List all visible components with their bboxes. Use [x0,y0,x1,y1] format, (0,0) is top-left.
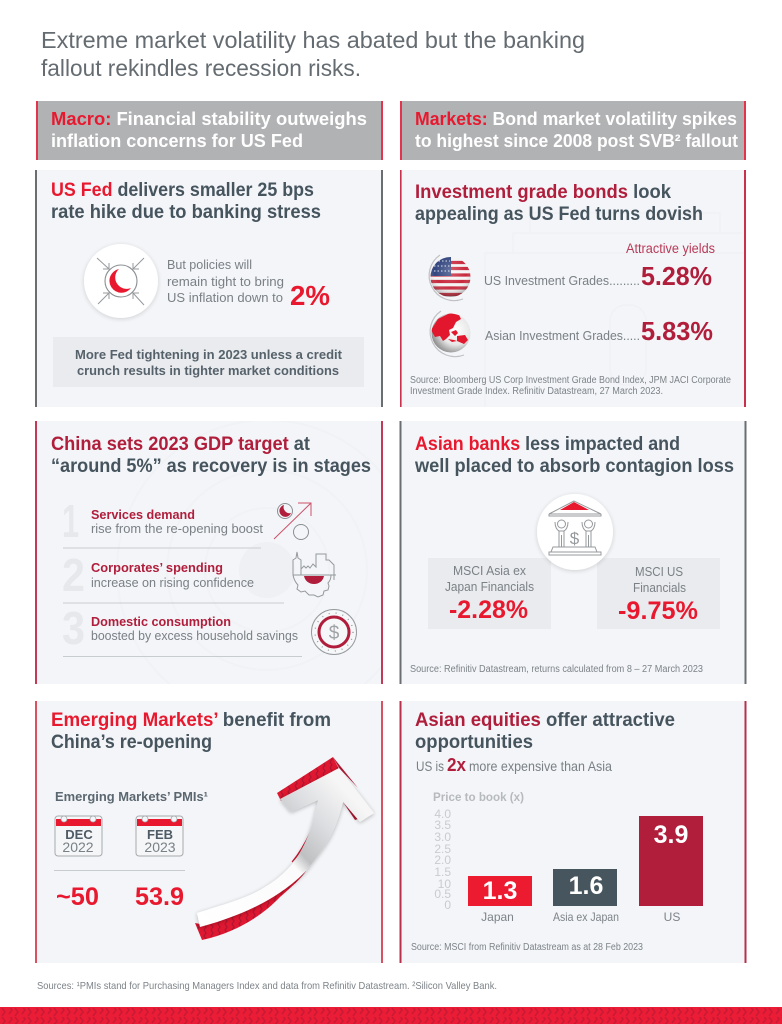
stat box: MSCI US: MSCI US [635,564,683,579]
panel: macro header: Macro: Financial stability outweighs [51,109,367,129]
bar chart: price to book: 4.0 [434,807,451,821]
label: attractive yields: Attractive yields [626,241,715,256]
item 2: corporates' spending: increase on rising confidence [91,575,254,590]
bar chart: price to book: 0.5 [434,887,451,901]
panel: investment grade bonds [400,170,746,407]
title: Extreme market volatility has abated but the banking [41,27,585,53]
item 1: services demand: rise from the re-opening boost [91,521,263,536]
title: fallout rekindles recession risks. [41,55,361,81]
bar: US [639,816,703,924]
icon: tightening circle [84,244,158,318]
panel: markets header: to highest since 2008 post SVB² fallout [415,131,738,151]
icon: US flag globe [429,255,471,301]
bar: Asia ex Japan: Asia ex Japan [553,910,619,924]
item 1: services demand [62,495,263,548]
footnote: sources: Sources: ¹PMIs stand for Purchasing Managers Index and data from Refinitiv Datastream. ²Silicon Valley Bank. [37,980,497,992]
bar: Asia ex Japan: 1.6 [569,872,603,900]
panel: Asian banks [400,421,746,684]
callout: more fed tightening [53,337,364,387]
source: equities: Source: MSCI from Refinitiv Datastream as at 28 Feb 2023 [411,942,643,953]
heading: Asian equities [415,710,675,753]
icon: calendar Dec 2022: 2022 [62,839,94,855]
bar chart: price to book: 3.5 [434,818,451,832]
stat box: MSCI US: -9.75% [618,597,698,625]
text: policies: remain tight to bring [167,274,284,289]
source: bonds: Source: Bloomberg US Corp Investment Grade Bond Index, JPM JACI Corporate [410,375,731,386]
bar chart: price to book: 10 [438,877,451,891]
subheading: 2x: US is [416,758,444,774]
arrow: rising [195,757,374,940]
bar chart: price to book: 1.5 [434,865,451,879]
panel: macro header: inflation concerns for US Fed [51,131,303,151]
stat box: MSCI Asia ex Japan: MSCI Asia ex [453,563,526,578]
stat box: MSCI Asia ex Japan: -2.28% [449,596,528,624]
callout: more fed tightening: crunch results in tighter market conditions [77,363,339,378]
icon: bank [537,494,613,570]
heading: investment grade [415,182,703,225]
icon: bank: $ [570,529,580,548]
bar: US: 3.9 [654,821,688,849]
stat: 2%: 2% [290,280,330,311]
icon: Asia globe [430,311,471,357]
heading: Emerging Markets: China’s re-opening [51,732,212,753]
subheading: 2x: 2x [447,755,466,775]
panel: Emerging Markets [35,701,383,963]
source: bonds: Investment Grade Index. Refinitiv Datastream, 27 March 2023. [410,386,663,397]
item 1: services demand: 1 [62,495,79,547]
row: Asian investment grades: 5.83% [641,316,713,346]
bar chart: price to book: Price to book (x) [433,790,524,804]
row: US investment grades [484,261,712,291]
bar: US: US [664,910,680,924]
item 3: domestic consumption [62,602,302,657]
icon: calendar Feb 2023: 2023 [144,839,176,855]
bar chart: price to book: 0 [444,898,451,912]
icon: calendar Feb 2023: FEB [147,827,173,842]
title [41,27,585,81]
stat box: MSCI Asia ex Japan [428,558,551,629]
heading: investment grade: appealing as US Fed turns dovish [415,204,703,225]
row: Asian investment grades: Asian Investment Grades..... [485,328,640,343]
stat: 53.9: 53.9 [135,883,184,911]
text: policies [167,257,284,305]
icon: dollar coin [312,610,356,654]
panel: markets header [400,101,746,160]
row: Asian investment grades [485,316,713,346]
icon: city gear [293,552,336,597]
subheading: 2x [416,755,612,775]
item 3: domestic consumption: boosted by excess household savings [91,628,298,643]
stat box: MSCI Asia ex Japan: Japan Financials [445,579,534,594]
bar: Japan [468,876,532,924]
subheading: 2x: more expensive than Asia [469,758,612,774]
row: US investment grades: US Investment Grades......... [484,273,640,288]
item 2: corporates' spending: Corporates’ spending [91,560,223,575]
icon: calendar Feb 2023 [136,816,183,856]
heading: US Fed: US Fed delivers smaller 25 bps [51,180,314,201]
bar chart: price to book: 3.0 [434,830,451,844]
stat box: MSCI US: Financials [633,580,686,595]
panel: markets header: Markets: Bond market volatility spikes [415,109,737,129]
text: policies: US inflation down to [167,290,283,305]
panel: US Fed [35,170,383,407]
heading: US Fed [51,180,321,223]
text: policies: But policies will [167,257,252,272]
bar: Japan: 1.3 [483,877,517,905]
callout: more fed tightening: More Fed tightening in 2023 unless a credit [75,347,343,362]
heading: investment grade: Investment grade bonds look [415,182,671,203]
item 2: corporates' spending: 2 [62,549,85,601]
icon: percent arrow [274,503,311,540]
row: US investment grades: 5.28% [641,261,712,291]
heading: Emerging Markets [51,710,331,753]
icon: dollar coin: $ [329,623,340,644]
bar chart: price to book: 2.0 [434,853,451,867]
bar chart: price to book [433,790,703,924]
panel: China GDP [35,421,383,684]
bar: Asia ex Japan [553,869,619,924]
item 2: corporates' spending [62,549,284,604]
source: banks: Source: Refinitiv Datastream, returns calculated from 8 – 27 March 2023 [410,664,703,675]
heading: China: “around 5%” as recovery is in stages [51,456,371,477]
icon: calendar Dec 2022: DEC [65,827,93,842]
stat box: MSCI US [597,558,720,629]
stat: ~50: ~50 [56,883,99,911]
source: bonds [410,375,731,397]
item 3: domestic consumption: Domestic consumption [91,614,231,629]
panel: Asian equities [400,701,746,963]
icon: calendar Dec 2022 [55,816,102,856]
bar chart: price to book: 2.5 [434,842,451,856]
heading: Asian banks [414,434,734,477]
heading: China [51,434,371,477]
heading: Emerging Markets: Emerging Markets’ benefit from [51,710,331,731]
item 1: services demand: Services demand [91,507,195,522]
label: PMIs: Emerging Markets’ PMIs¹ [55,789,208,804]
heading: China: China sets 2023 GDP target at [51,434,311,455]
heading: Asian banks: Asian banks less impacted and [415,434,680,455]
heading: US Fed: rate hike due to banking stress [51,202,321,223]
bar: Japan: Japan [481,910,514,924]
heading: Asian equities: Asian equities offer attractive [415,710,675,731]
heading: Asian banks: well placed to absorb contagion loss [414,456,734,477]
item 3: domestic consumption: 3 [62,602,85,654]
footer band [0,1007,782,1024]
panel: macro header [36,101,383,160]
heading: Asian equities: opportunities [415,732,533,753]
